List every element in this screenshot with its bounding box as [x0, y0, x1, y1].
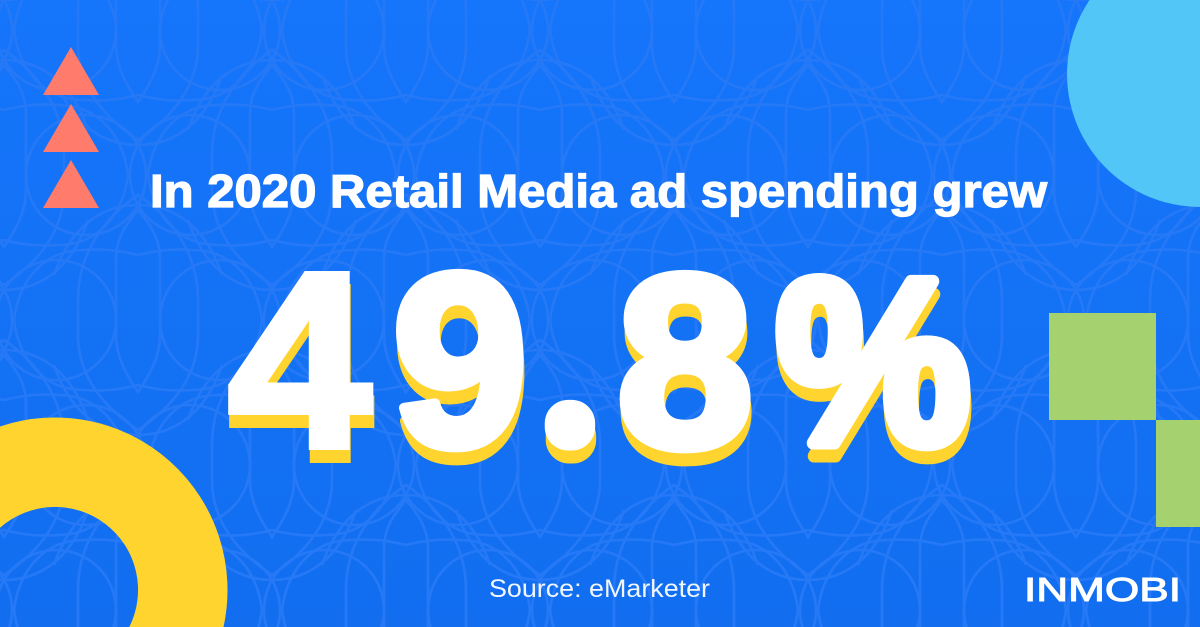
source line: Source: eMarketer — [489, 575, 710, 603]
big number: 49.8%: 9 — [394, 236, 528, 510]
decorative green squares — [1049, 313, 1200, 527]
decorative light blue circle — [1067, 0, 1200, 207]
big number: 49.8%: % — [777, 245, 971, 507]
big number: 49.8%: % — [776, 232, 970, 494]
big number: 49.8%: . — [567, 406, 573, 433]
decorative yellow ring — [0, 417, 228, 627]
big number: 49.8%: . — [568, 419, 574, 446]
big number: 49.8%: 4 — [228, 220, 371, 500]
big number: 49.8%: 9 — [393, 223, 527, 497]
logo: InMobi: INMOBI — [1024, 571, 1181, 608]
big number: 49.8%: 4 — [229, 233, 372, 513]
big number: 49.8% — [228, 220, 971, 513]
icon: three coral triangles — [43, 47, 99, 208]
big number: 49.8%: 8 — [617, 224, 753, 498]
title: In 2020 Retail Media ad spending grew — [150, 165, 1047, 217]
big number: 49.8%: 8 — [618, 237, 754, 511]
